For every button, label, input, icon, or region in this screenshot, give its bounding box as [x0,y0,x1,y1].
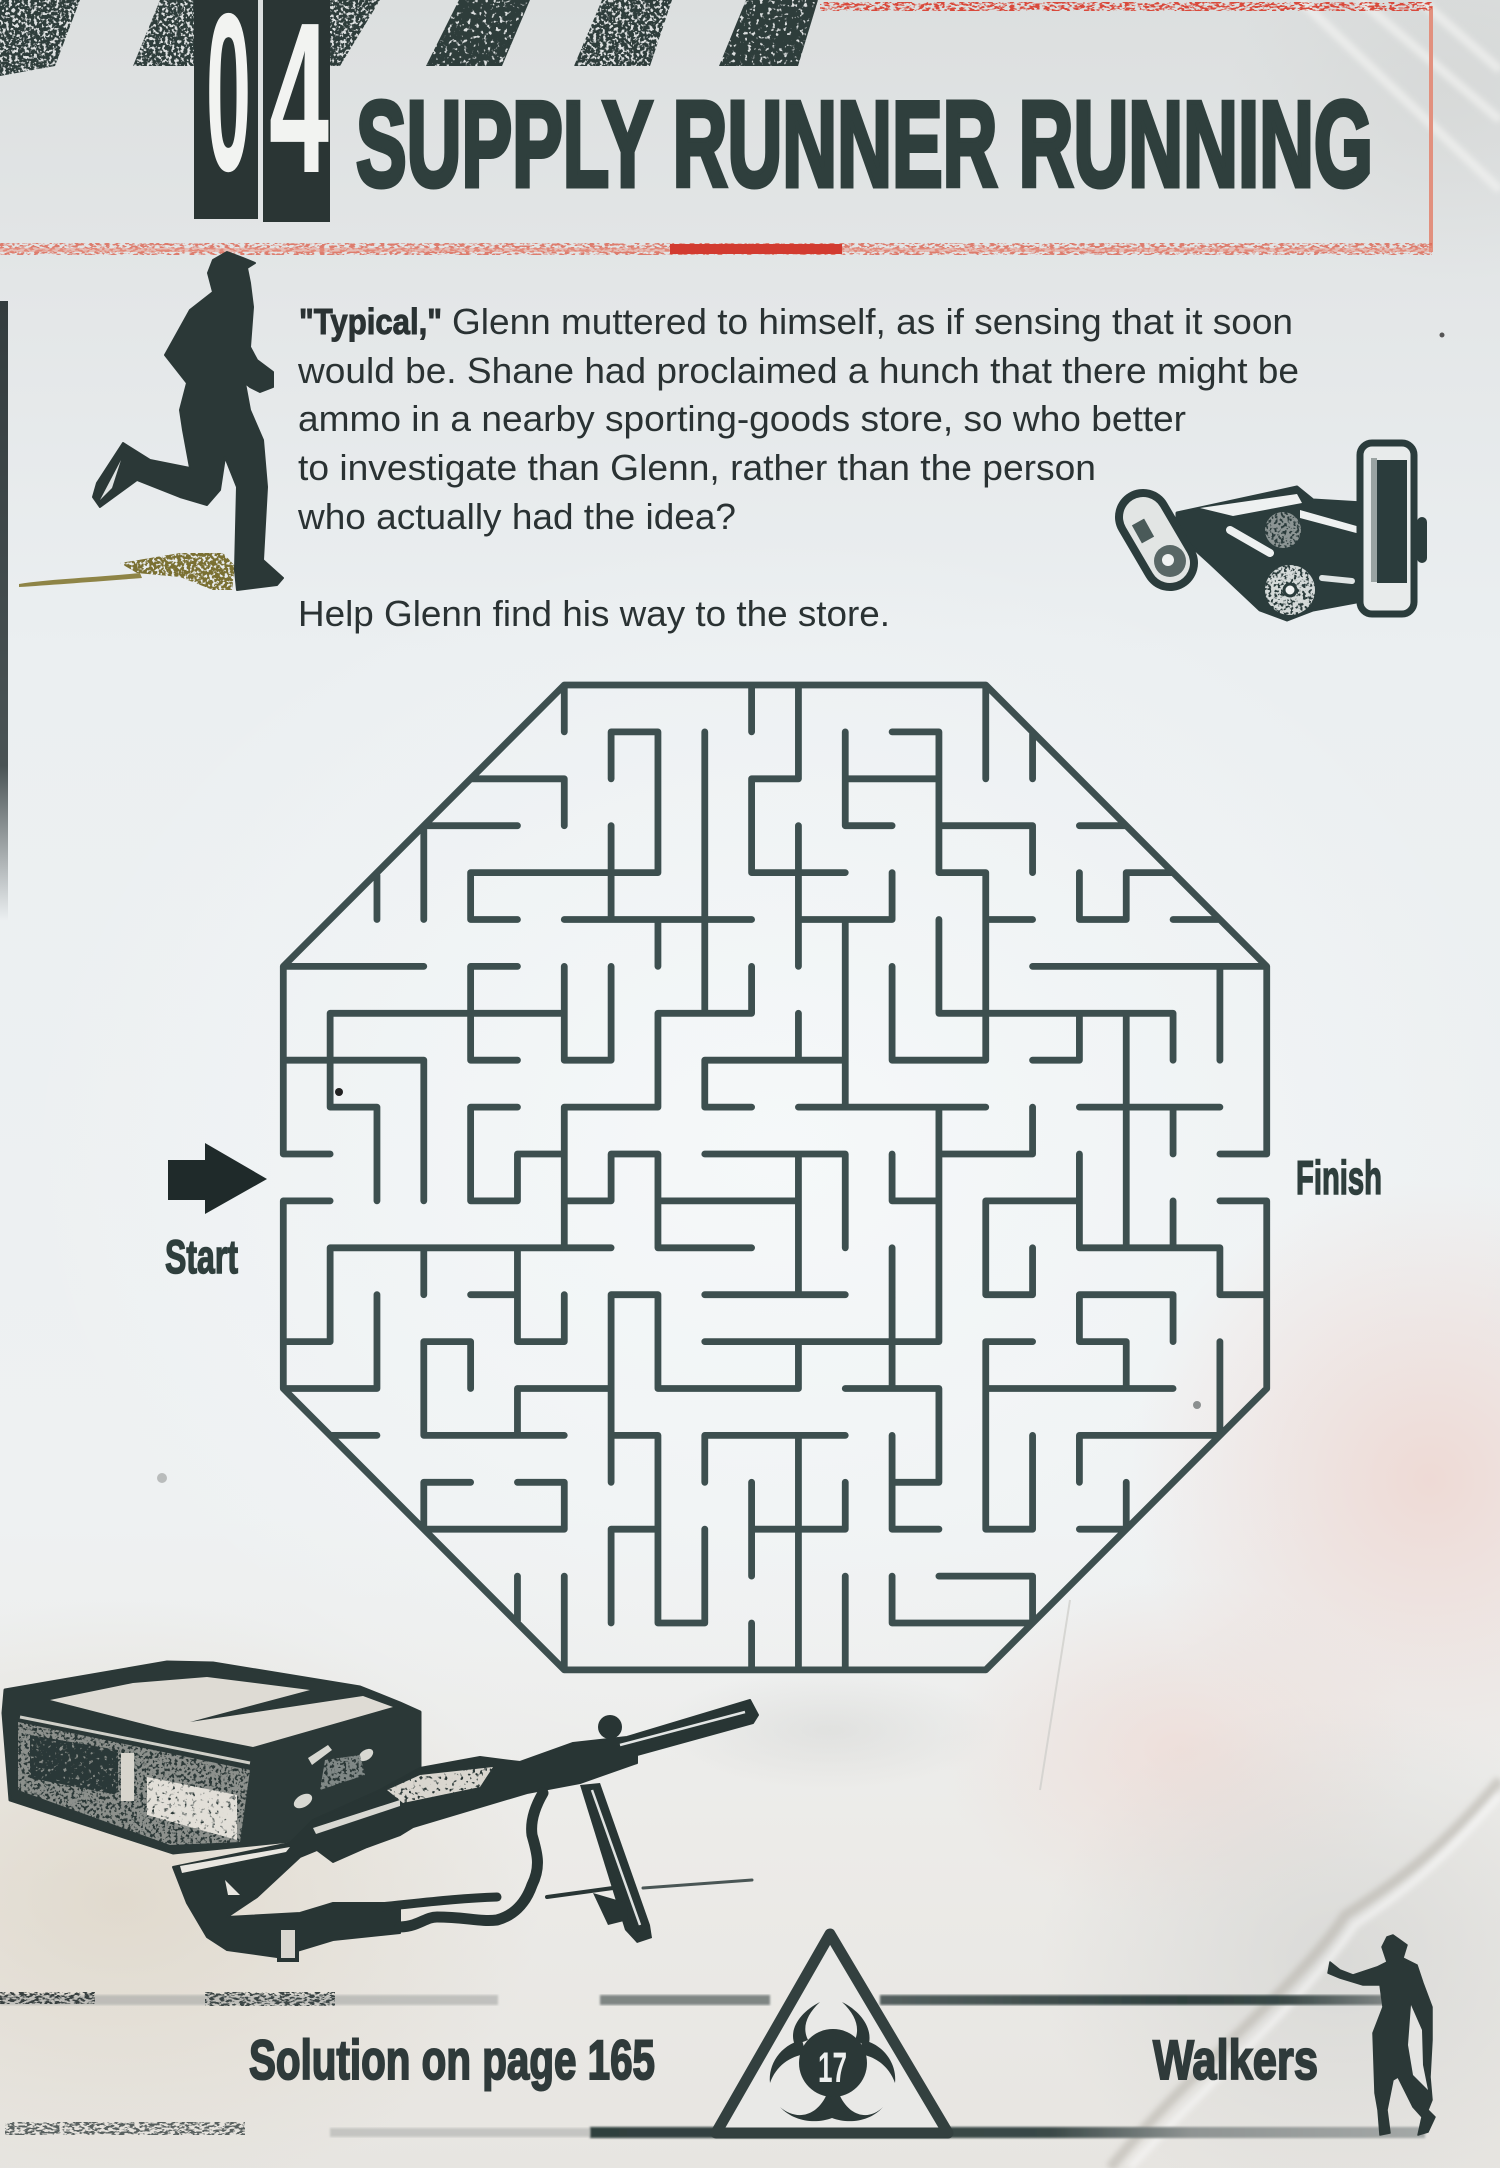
text: solution reference: Solution on page 165 [249,2028,655,2091]
arrow: start [168,1143,267,1214]
bold opening word: "Typical," [299,301,442,342]
box silhouette [3,1662,420,1853]
rifle sight [598,1715,622,1739]
ground splatter [19,553,235,590]
text: section name: Walkers [1153,2028,1318,2091]
page badge: biohazard triangle [716,1934,948,2133]
page number: 17 [818,2044,847,2092]
red frame [0,2,1433,255]
icon: shotgun shells [1138,443,1427,620]
maze walls [283,685,1267,1670]
bipod [580,1783,652,1943]
rifle barrel and receiver [173,1700,758,1957]
left shell [1138,517,1186,577]
digit tile 4 [263,0,330,222]
label: finish: Finish [1296,1151,1382,1204]
digit tile 0 [194,0,258,219]
sling [380,1793,752,1927]
rifle with strap [173,1700,758,1960]
upright shell [1360,443,1427,614]
box lid [50,1677,393,1747]
footer rule: bottom [5,2122,1425,2138]
shell cluster body [1177,487,1367,620]
body text: would be. Shane had proclaimed a hunch that there might be [297,350,1299,391]
footer rule: top [0,1992,1383,2006]
body text: who actually had the idea? [297,496,736,537]
icon: walker silhouette [1328,1935,1435,2135]
hazard stripes [0,0,818,76]
icon: running man silhouette [93,252,283,590]
handguard [387,1767,493,1803]
biohazard symbol [770,2002,895,2121]
maze [283,685,1267,1670]
label: start: Start [165,1230,238,1283]
box side detail [291,1745,375,1811]
body text: ammo in a nearby sporting-goods store, so who better [298,398,1186,439]
body text [297,301,1299,634]
box front [18,1717,250,1845]
left edge dark bar [0,301,8,921]
body text: Help Glenn find his way to the store. [298,593,890,634]
body text: Glenn muttered to himself, as if sensing that it soon [452,301,1293,342]
body text: to investigate than Glenn, rather than the person [298,447,1096,488]
ammo box [3,1662,420,1853]
strap buckle [279,1928,297,1960]
